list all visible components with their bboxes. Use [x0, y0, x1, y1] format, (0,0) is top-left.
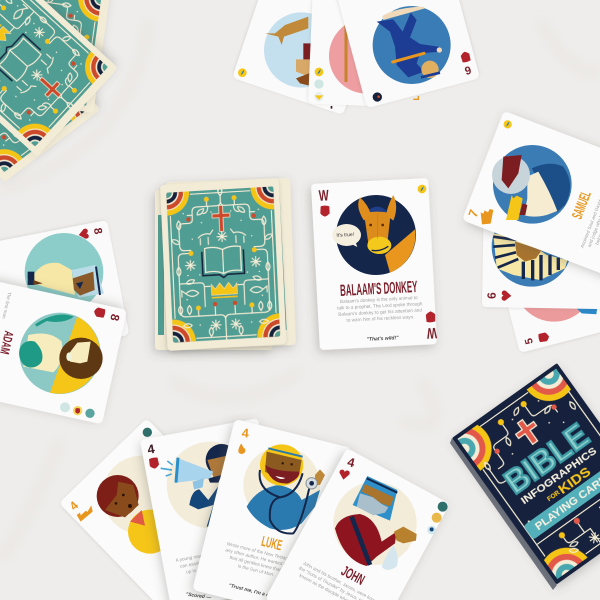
rank seven and crown [466, 208, 493, 224]
card: 8 upper left [0, 220, 129, 367]
Luke body text: any other author. He wanted to make sure [225, 547, 311, 573]
box band PLAYING CARDS [523, 455, 600, 540]
card: top left light blue figure [232, 0, 396, 115]
card: 8 upper left: 8 [91, 227, 104, 235]
card body text [337, 295, 424, 323]
card: 5 with pink circle [491, 198, 600, 353]
card: top right blue warrior with sword: 6 [463, 63, 472, 76]
card: Luke: 4 [241, 426, 249, 441]
megaphone card body text: A young man who [175, 551, 213, 563]
rank and suit top [318, 185, 426, 217]
card: pharaoh 6: 6 [485, 292, 499, 299]
card: top centre pink figure [308, 0, 404, 109]
box cross [511, 415, 544, 449]
Samuel illustration [492, 145, 572, 224]
card body text: to warn him of his reckless ways. [346, 314, 415, 323]
card: 5 with pink circle: 5 [523, 337, 536, 345]
card: 4 of crowns: 4 [67, 498, 81, 513]
card: 4 with megaphone: 4 [146, 442, 156, 457]
Adam illustration [19, 313, 103, 394]
card backs fanned top left [0, 0, 141, 204]
card: top right blue warrior with sword [324, 0, 480, 108]
card: 4 of crowns [59, 418, 266, 600]
megaphone card body text: up to war [186, 566, 206, 575]
card: pharaoh 6 [482, 190, 600, 310]
card body text: Balaam's donkey is the only animal to [340, 295, 418, 304]
box title BIBLE: BIBLE [497, 416, 595, 501]
rank and suit bottom: W [426, 324, 437, 341]
Luke body text: is the Son of Man. [237, 563, 275, 577]
card: Luke [192, 419, 351, 600]
rank and suit bottom [426, 311, 437, 341]
box FOR KIDS: FOR [546, 489, 562, 503]
box corner rainbows [458, 368, 588, 579]
card body text: Balaam's donkey to get his attention and [338, 307, 422, 317]
central deck of card backs [142, 162, 304, 367]
Luke illustration [243, 444, 325, 533]
Luke body text [222, 541, 312, 585]
Luke body text: that all gentiles knew that Jesus [229, 555, 295, 576]
speech bubble text: It's true! [336, 232, 354, 239]
box subtitle INFOGRAPHICS: INFOGRAPHICS [519, 445, 599, 507]
Luke body text: Wrote more of the New Testament than [226, 541, 306, 566]
card: Balaam's donkey: BALAAM'S DONKEY [340, 278, 418, 300]
box FOR KIDS: KIDS [555, 464, 594, 497]
card: John: 4 [346, 455, 356, 470]
megaphone card body text [175, 551, 215, 576]
card: Balaam's donkey [311, 178, 437, 350]
rank seven and crown: 7 [466, 208, 481, 219]
megaphone card body text: can easily go [180, 559, 208, 569]
rank and suit top: W [318, 187, 330, 205]
card body text: talk to a prophet. The Lord spoke through [337, 301, 423, 311]
card: John [265, 448, 450, 600]
card: Adam [0, 274, 127, 424]
John title: JOHN [338, 563, 367, 589]
Adam rank and suit: 8 [107, 313, 122, 323]
card: 4 with megaphone [140, 418, 289, 600]
John illustration [333, 476, 417, 570]
card: Samuel [462, 111, 600, 279]
quote: "That's wild!" [366, 335, 399, 343]
box FOR KIDS [543, 464, 594, 506]
Luke title: LUKE [260, 534, 284, 554]
donkey illustration [332, 195, 416, 275]
playing card box [450, 363, 600, 590]
Adam body text: The first man [1, 292, 12, 320]
megaphone figure [161, 442, 253, 528]
